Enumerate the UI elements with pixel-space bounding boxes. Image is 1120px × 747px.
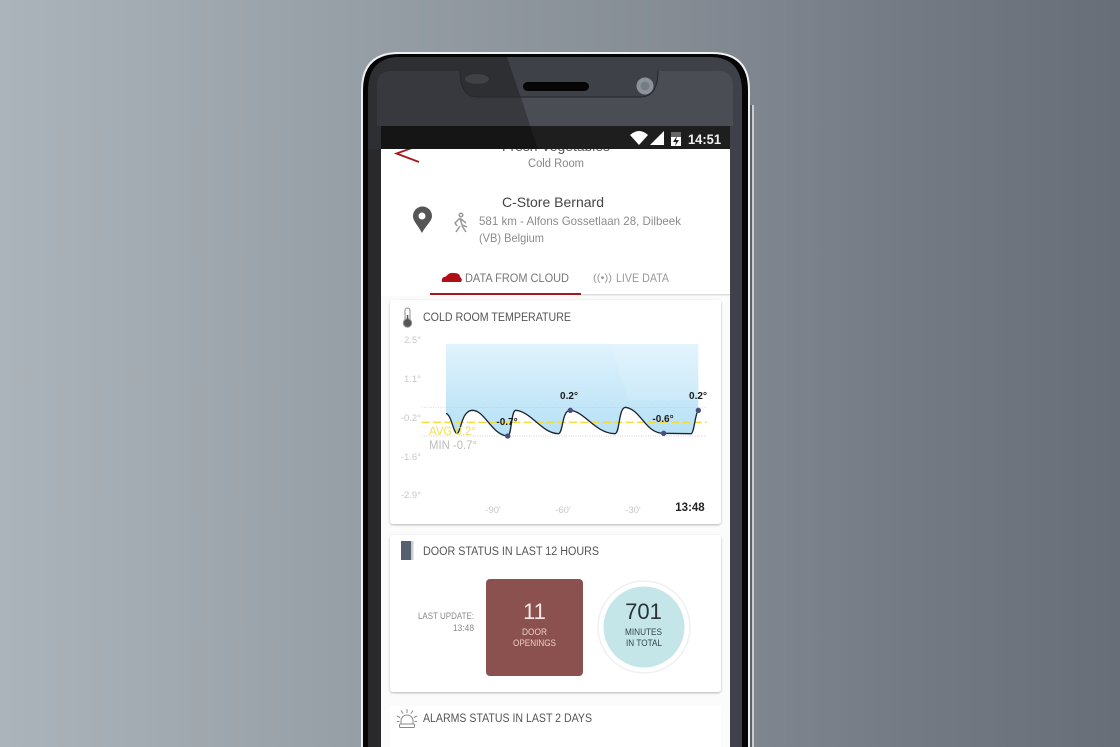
icon: door <box>401 541 414 560</box>
tab: data from cloud <box>430 273 581 295</box>
status time: 14:51 <box>688 132 721 147</box>
panel: door status <box>390 535 721 692</box>
data point labels <box>496 391 707 428</box>
y axis labels: 1.1° <box>404 374 421 385</box>
store address: 581 km - Alfons Gossetlaan 28, Dilbeek <box>479 214 682 228</box>
icon: location pin <box>413 207 432 233</box>
y axis labels: -1.6° <box>401 452 421 463</box>
earpiece and camera housing <box>465 74 654 94</box>
inner bezel panels <box>377 71 733 126</box>
line chart <box>401 335 707 516</box>
x axis labels: -30' <box>625 505 641 516</box>
y axis labels <box>401 335 421 501</box>
icon: thermometer <box>403 308 412 327</box>
data point labels: -0.7° <box>496 417 518 428</box>
status bar <box>381 126 730 149</box>
door openings tile: 11 <box>523 599 546 624</box>
icon: back arrow <box>396 148 419 162</box>
tab: live data: ((•)) <box>593 273 612 284</box>
tab: data from cloud: DATA FROM CLOUD <box>465 273 569 285</box>
last update: 13:48 <box>453 623 474 633</box>
store header <box>503 149 610 167</box>
store address: (VB) Belgium <box>479 231 544 245</box>
minutes in total circle: MINUTES <box>625 627 662 637</box>
icon: battery <box>671 132 681 146</box>
phone body <box>361 52 754 747</box>
data point labels: 0.2° <box>689 391 707 402</box>
heading: DOOR STATUS IN LAST 12 HOURS <box>423 546 599 558</box>
data point labels: 0.2° <box>560 391 578 402</box>
chart time: 13:48 <box>675 502 705 514</box>
minutes in total circle <box>598 581 690 673</box>
door openings tile: DOOR <box>522 627 547 637</box>
tab: live data: LIVE DATA <box>616 273 669 285</box>
store address <box>480 216 681 244</box>
icon: walking person <box>455 213 467 232</box>
last update <box>418 612 474 631</box>
minutes in total circle: IN TOTAL <box>626 638 662 648</box>
avg and min labels: AVG 0.2° <box>429 426 476 438</box>
heading: ALARMS STATUS IN LAST 2 DAYS <box>423 713 592 725</box>
heading: COLD ROOM TEMPERATURE <box>423 312 571 324</box>
screen <box>381 138 730 747</box>
y axis labels: -2.9° <box>401 490 421 501</box>
line chart: MIN -0.7° <box>429 440 477 452</box>
panel: alarms status <box>396 709 592 728</box>
store header: Cold Room <box>528 158 584 170</box>
y axis labels: -0.2° <box>401 413 421 424</box>
x axis labels: -90' <box>485 505 501 516</box>
tab: live data <box>594 274 669 283</box>
store header: Fresh Vegetables <box>502 138 610 154</box>
store name: C-Store Bernard <box>502 194 604 210</box>
door openings tile <box>486 579 583 676</box>
x axis labels <box>486 506 640 513</box>
minutes in total circle: 701 <box>625 599 662 624</box>
panel: cold room temperature <box>390 300 721 524</box>
icon: signal <box>650 131 664 145</box>
door openings tile: OPENINGS <box>513 638 556 648</box>
last update: LAST UPDATE: <box>418 611 474 621</box>
y axis labels: 2.5° <box>404 335 421 346</box>
icon: alarm light <box>397 709 417 728</box>
x axis labels: -60' <box>555 505 571 516</box>
icon: wifi <box>630 131 648 145</box>
data point labels: -0.6° <box>652 414 674 425</box>
